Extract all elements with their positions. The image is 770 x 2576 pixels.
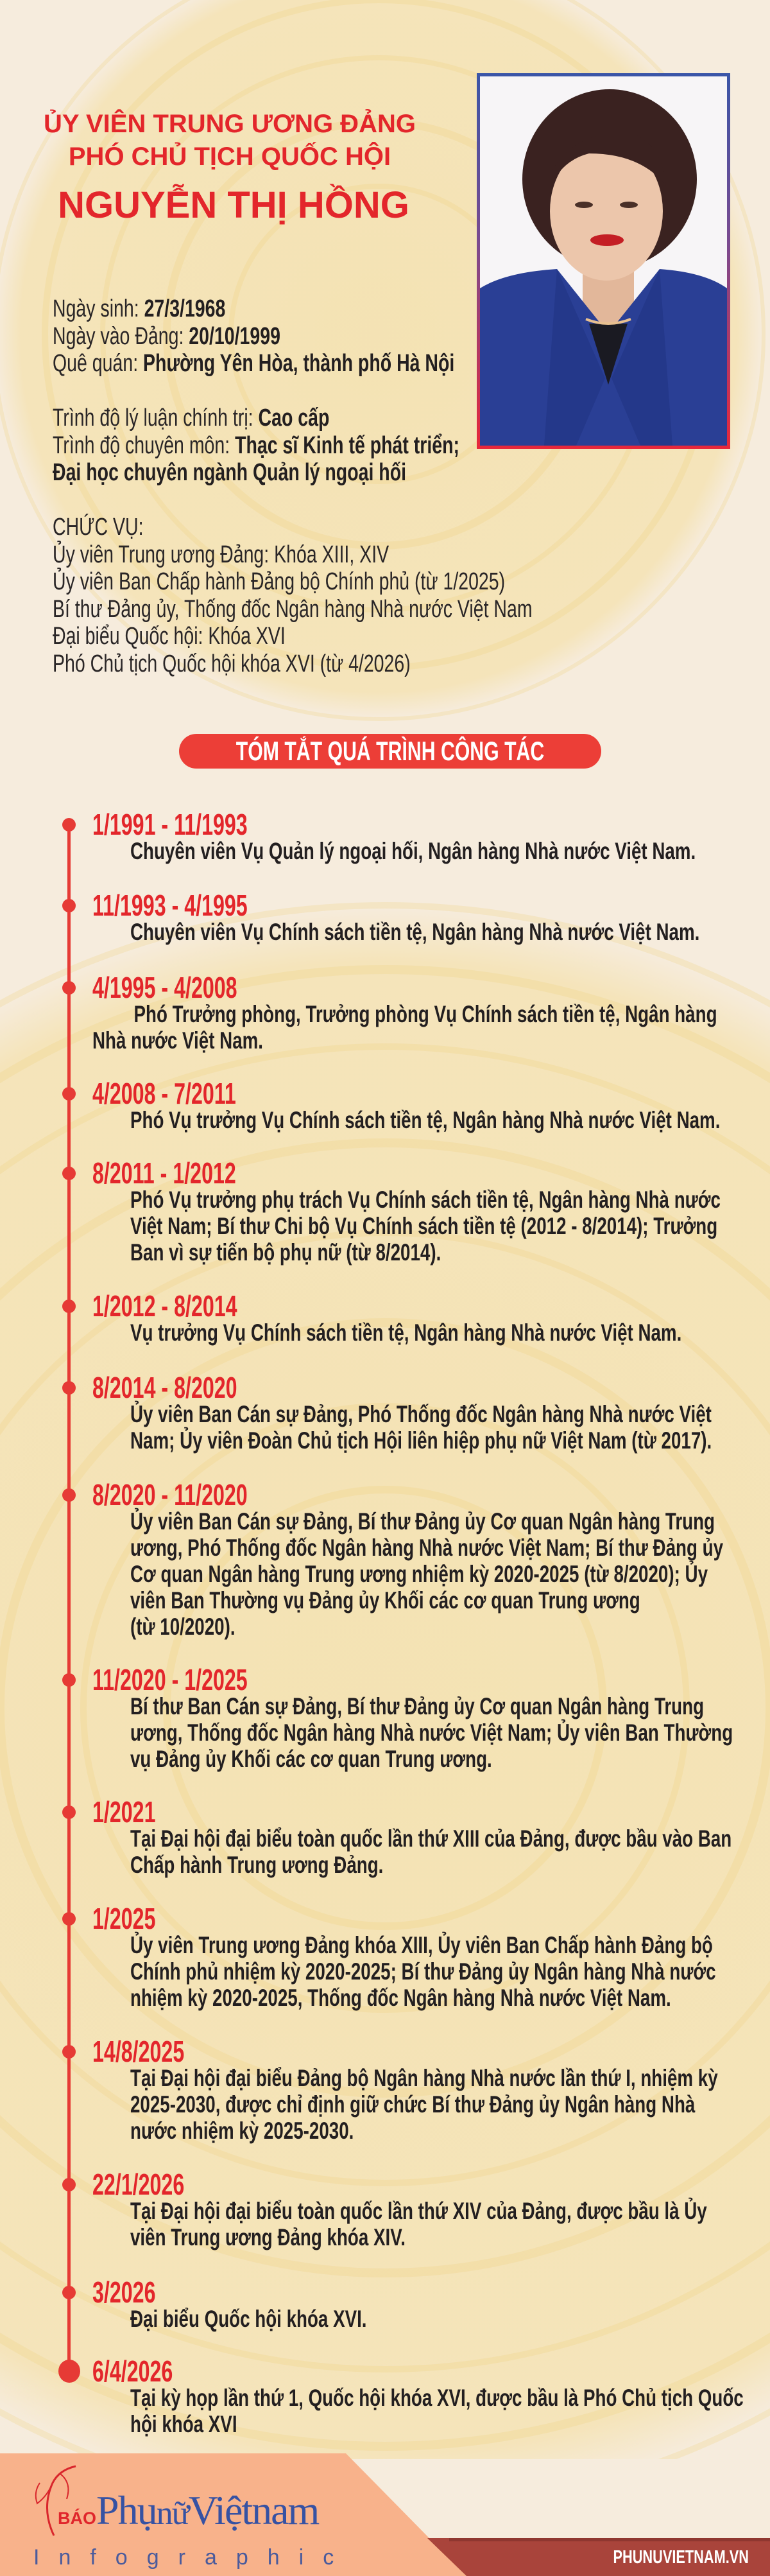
timeline entry 3: 4/1995 - 4/2008 <box>92 971 237 1004</box>
timeline entry 5: Ban vì sự tiến bộ phụ nữ (từ 8/2014). <box>130 1239 441 1266</box>
timeline entry 12 <box>62 2035 718 2144</box>
website url: PHUNUVIETNAM.VN <box>613 2547 749 2568</box>
timeline entry 14 <box>62 2276 367 2332</box>
timeline entry 2 <box>62 889 699 945</box>
timeline entry 5 <box>62 1156 721 1266</box>
title: position lines <box>44 109 416 226</box>
timeline entry 5: Việt Nam; Bí thư Chi bộ Vụ Chính sách tiền tệ (2012 - 8/2014); Trưởng <box>130 1213 717 1239</box>
personal info text: Quê quán: Phường Yên Hòa, thành phố Hà Nội <box>53 350 454 377</box>
timeline entry 6 <box>62 1289 681 1346</box>
timeline entry 7 <box>62 1371 712 1454</box>
personal info text: Trình độ chuyên môn: Thạc sĩ Kinh tế phát triển; <box>53 431 459 458</box>
section banner: timeline heading: TÓM TẮT QUÁ TRÌNH CÔNG TÁC <box>236 736 544 766</box>
timeline entry 15 (final): 6/4/2026 <box>92 2354 173 2388</box>
timeline entry 3 <box>62 971 717 1054</box>
timeline entry 11: Chính phủ nhiệm kỳ 2020-2025; Bí thư Đảng ủy Ngân hàng Nhà nước <box>130 1958 716 1985</box>
timeline entry 2: Chuyên viên Vụ Chính sách tiền tệ, Ngân hàng Nhà nước Việt Nam. <box>130 919 699 945</box>
personal info text: Ủy viên Trung ương Đảng: Khóa XIII, XIV <box>53 541 389 568</box>
timeline entry 1: 1/1991 - 11/1993 <box>92 808 248 841</box>
personal info text <box>53 295 533 677</box>
timeline entry 8 <box>62 1478 723 1640</box>
timeline entry 13 <box>62 2168 707 2250</box>
timeline entry 13: 22/1/2026 <box>92 2168 184 2201</box>
timeline entry 4: Phó Vụ trưởng Vụ Chính sách tiền tệ, Ngân hàng Nhà nước Việt Nam. <box>130 1107 720 1133</box>
footer background shapes <box>0 2453 770 2576</box>
jacket <box>480 269 727 446</box>
timeline entry 11: Ủy viên Trung ương Đảng khóa XIII, Ủy viên Ban Chấp hành Đảng bộ <box>130 1932 713 1958</box>
timeline vertical line <box>67 824 71 2372</box>
timeline entry 10: Tại Đại hội đại biểu toàn quốc lần thứ XIII của Đảng, được bầu vào Ban <box>130 1825 732 1852</box>
timeline entry 7: Ủy viên Ban Cán sự Đảng, Phó Thống đốc Ngân hàng Nhà nước Việt <box>130 1401 712 1427</box>
personal info text: Bí thư Đảng ủy, Thống đốc Ngân hàng Nhà nước Việt Nam <box>53 596 533 623</box>
title: name: NGUYỄN THỊ HỒNG <box>58 184 409 226</box>
timeline entry 8: viên Ban Thường vụ Đảng ủy Khối các cơ quan Trung ương <box>130 1587 640 1614</box>
timeline entry 14: Đại biểu Quốc hội khóa XVI. <box>130 2306 367 2332</box>
personal info text: Đại học chuyên ngành Quản lý ngoại hối <box>53 459 406 486</box>
timeline entry 2: 11/1993 - 4/1995 <box>92 889 248 922</box>
timeline entry 11 <box>62 1902 716 2011</box>
timeline entry 11: 1/2025 <box>92 1902 155 1935</box>
logo: Infographic wordmark: Infographic <box>33 2545 353 2570</box>
timeline entry 7: 8/2014 - 8/2020 <box>92 1371 237 1404</box>
timeline entry 7: Nam; Ủy viên Đoàn Chủ tịch Hội liên hiệp phụ nữ Việt Nam (từ 2017). <box>130 1427 712 1454</box>
timeline entry 4: 4/2008 - 7/2011 <box>92 1077 236 1110</box>
timeline entry 15 (final): Tại kỳ họp lần thứ 1, Quốc hội khóa XVI, được bầu là Phó Chủ tịch Quốc <box>130 2385 744 2411</box>
timeline entry 9: vụ Đảng ủy Khối các cơ quan Trung ương. <box>130 1746 492 1772</box>
section banner: timeline heading <box>179 734 601 769</box>
timeline entry 8: Cơ quan Ngân hàng Trung ương nhiệm kỳ 2020-2025 (từ 8/2020); Ủy <box>130 1561 708 1587</box>
timeline entry 8: (từ 10/2020). <box>130 1614 235 1640</box>
timeline entry 9: 11/2020 - 1/2025 <box>92 1663 248 1696</box>
timeline entry 12: nước nhiệm kỳ 2025-2030. <box>130 2118 354 2144</box>
title line 2: PHÓ CHỦ TỊCH QUỐC HỘI <box>69 143 391 171</box>
timeline entry 8: ương, Phó Thống đốc Ngân hàng Nhà nước Việt Nam; Bí thư Đảng ủy <box>130 1535 723 1561</box>
personal info text: Trình độ lý luận chính trị: Cao cấp <box>53 405 329 431</box>
timeline entry 8: 8/2020 - 11/2020 <box>92 1478 248 1511</box>
timeline entry 15 (final) <box>58 2354 744 2437</box>
personal info text: CHỨC VỤ: <box>53 514 144 541</box>
logo: brand name: BÁOPhụnữViệtnam <box>58 2487 318 2533</box>
timeline entry 9: ương, Thống đốc Ngân hàng Nhà nước Việt Nam; Ủy viên Ban Thường <box>130 1719 733 1746</box>
neck <box>583 250 634 327</box>
timeline entry 12: 2025-2030, được chỉ định giữ chức Bí thư Đảng ủy Ngân hàng Nhà <box>130 2091 695 2118</box>
timeline entry 13: viên Trung ương Đảng khóa XIV. <box>130 2224 406 2250</box>
timeline entry 5: 8/2011 - 1/2012 <box>92 1156 236 1190</box>
personal info text: Ủy viên Ban Chấp hành Đảng bộ Chính phủ (từ 1/2025) <box>53 568 505 595</box>
timeline entry 9: Bí thư Ban Cán sự Đảng, Bí thư Đảng ủy Cơ quan Ngân hàng Trung <box>130 1693 704 1719</box>
personal info text: Phó Chủ tịch Quốc hội khóa XVI (từ 4/2026) <box>53 650 411 677</box>
timeline entry 3: Phó Trưởng phòng, Trưởng phòng Vụ Chính sách tiền tệ, Ngân hàng <box>133 1001 717 1027</box>
timeline entry 15 (final): hội khóa XVI <box>130 2411 237 2437</box>
timeline entry 12: 14/8/2025 <box>92 2035 184 2068</box>
portrait photo <box>477 73 730 449</box>
timeline entry 13: Tại Đại hội đại biểu toàn quốc lần thứ XIV của Đảng, được bầu là Ủy <box>130 2198 707 2224</box>
timeline entry 6: 1/2012 - 8/2014 <box>92 1289 237 1323</box>
timeline entry 10: Chấp hành Trung ương Đảng. <box>130 1852 383 1878</box>
timeline entry 3: Nhà nước Việt Nam. <box>92 1027 263 1054</box>
timeline entry 6: Vụ trưởng Vụ Chính sách tiền tệ, Ngân hàng Nhà nước Việt Nam. <box>130 1319 681 1346</box>
timeline entry 5: Phó Vụ trưởng phụ trách Vụ Chính sách tiền tệ, Ngân hàng Nhà nước <box>130 1187 721 1213</box>
timeline entry 1 <box>62 808 696 864</box>
timeline entry 4 <box>62 1077 720 1133</box>
timeline entry 11: nhiệm kỳ 2020-2025, Thống đốc Ngân hàng Nhà nước Việt Nam. <box>130 1985 671 2011</box>
footer <box>0 2453 770 2576</box>
timeline entry 1: Chuyên viên Vụ Quản lý ngoại hối, Ngân hàng Nhà nước Việt Nam. <box>130 838 696 864</box>
personal info text: Ngày sinh: 27/3/1968 <box>53 295 225 322</box>
timeline entry 8: Ủy viên Ban Cán sự Đảng, Bí thư Đảng ủy Cơ quan Ngân hàng Trung <box>130 1508 715 1535</box>
hair <box>522 89 697 269</box>
timeline entry 9 <box>62 1663 733 1772</box>
title line 1: ỦY VIÊN TRUNG ƯƠNG ĐẢNG <box>44 110 416 138</box>
timeline entry 10: 1/2021 <box>92 1795 155 1829</box>
personal info text: Đại biểu Quốc hội: Khóa XVI <box>53 623 286 650</box>
face <box>550 142 663 281</box>
timeline entry 14: 3/2026 <box>92 2276 155 2309</box>
logo: lotus icon <box>35 2466 76 2536</box>
timeline entry 12: Tại Đại hội đại biểu Đảng bộ Ngân hàng Nhà nước lần thứ I, nhiệm kỳ <box>130 2065 718 2091</box>
timeline entry 10 <box>62 1795 732 1878</box>
personal info text: Ngày vào Đảng: 20/10/1999 <box>53 322 280 349</box>
